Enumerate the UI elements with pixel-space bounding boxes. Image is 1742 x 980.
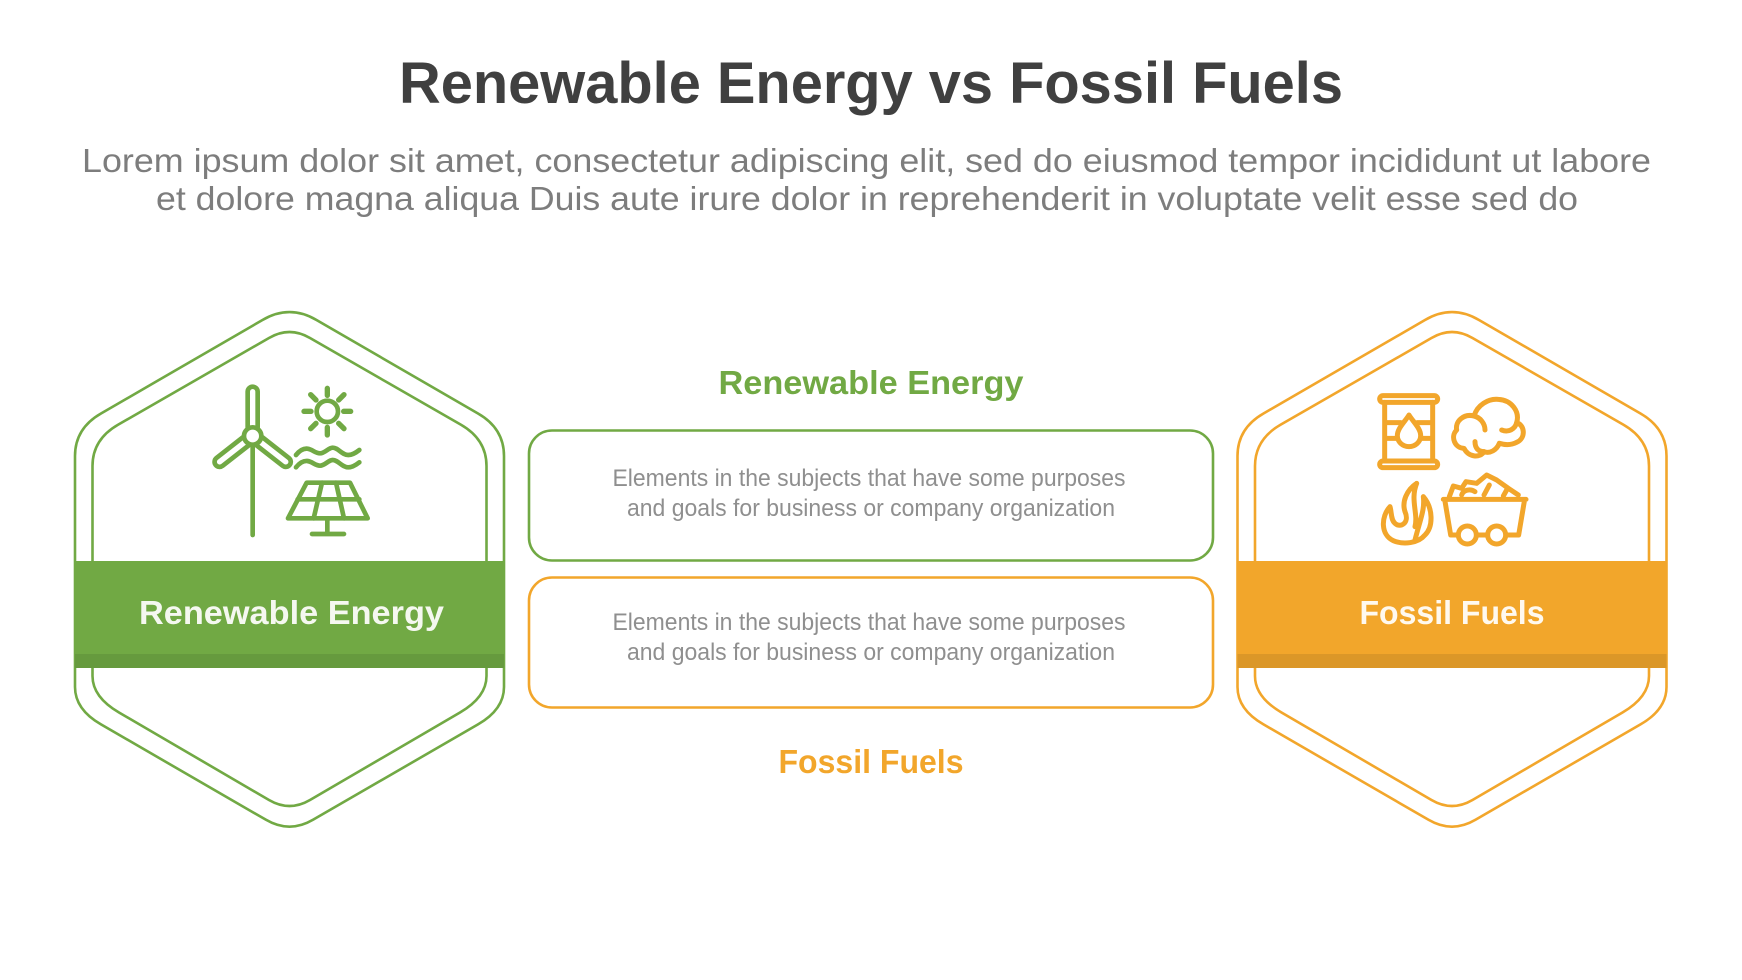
hexagon outlines (1238, 312, 1666, 827)
subtitle text block (82, 142, 1651, 217)
panel: fossil fuels description box: and goals for business or company organization (627, 639, 1115, 666)
panel: fossil fuels description box: Elements in the subjects that have some purposes (612, 609, 1126, 636)
waves (296, 448, 359, 467)
panel: renewable energy description box (529, 430, 1213, 560)
panel: fossil fuels hexagon (1238, 312, 1666, 827)
oil barrel (1380, 396, 1438, 468)
panel: renewable energy description box: Elements in the subjects that have some purposes (612, 465, 1126, 492)
hexagon outlines (75, 312, 504, 827)
solar panel (288, 483, 368, 534)
icon: wind turbine, sun, waves and solar panel (213, 387, 368, 535)
band: fossil fuels (1238, 561, 1666, 668)
panel: fossil fuels description box (529, 578, 1213, 708)
smoke cloud (1454, 399, 1523, 456)
subtitle text block: et dolore magna aliqua Duis aute irure dolor in reprehenderit in voluptate velit esse sed do (156, 180, 1578, 217)
band: fossil fuels: Fossil Fuels (1360, 594, 1544, 631)
band: renewable energy (75, 561, 504, 668)
band: renewable energy: Renewable Energy (139, 594, 445, 631)
heading: fossil fuels: Fossil Fuels (778, 743, 964, 780)
icon: oil barrel, smoke, flame and coal cart (1380, 396, 1526, 544)
wind turbine (213, 387, 293, 535)
sun (304, 388, 351, 435)
panel: renewable energy description box: and goals for business or company organization (627, 495, 1115, 522)
heading: renewable energy: Renewable Energy (718, 364, 1024, 401)
coal cart (1443, 475, 1526, 544)
flame (1383, 483, 1431, 543)
subtitle text block: Lorem ipsum dolor sit amet, consectetur adipiscing elit, sed do eiusmod tempor incididunt ut labore (82, 142, 1651, 179)
title: Renewable Energy vs Fossil Fuels (399, 51, 1343, 116)
panel: renewable energy hexagon (75, 312, 504, 827)
